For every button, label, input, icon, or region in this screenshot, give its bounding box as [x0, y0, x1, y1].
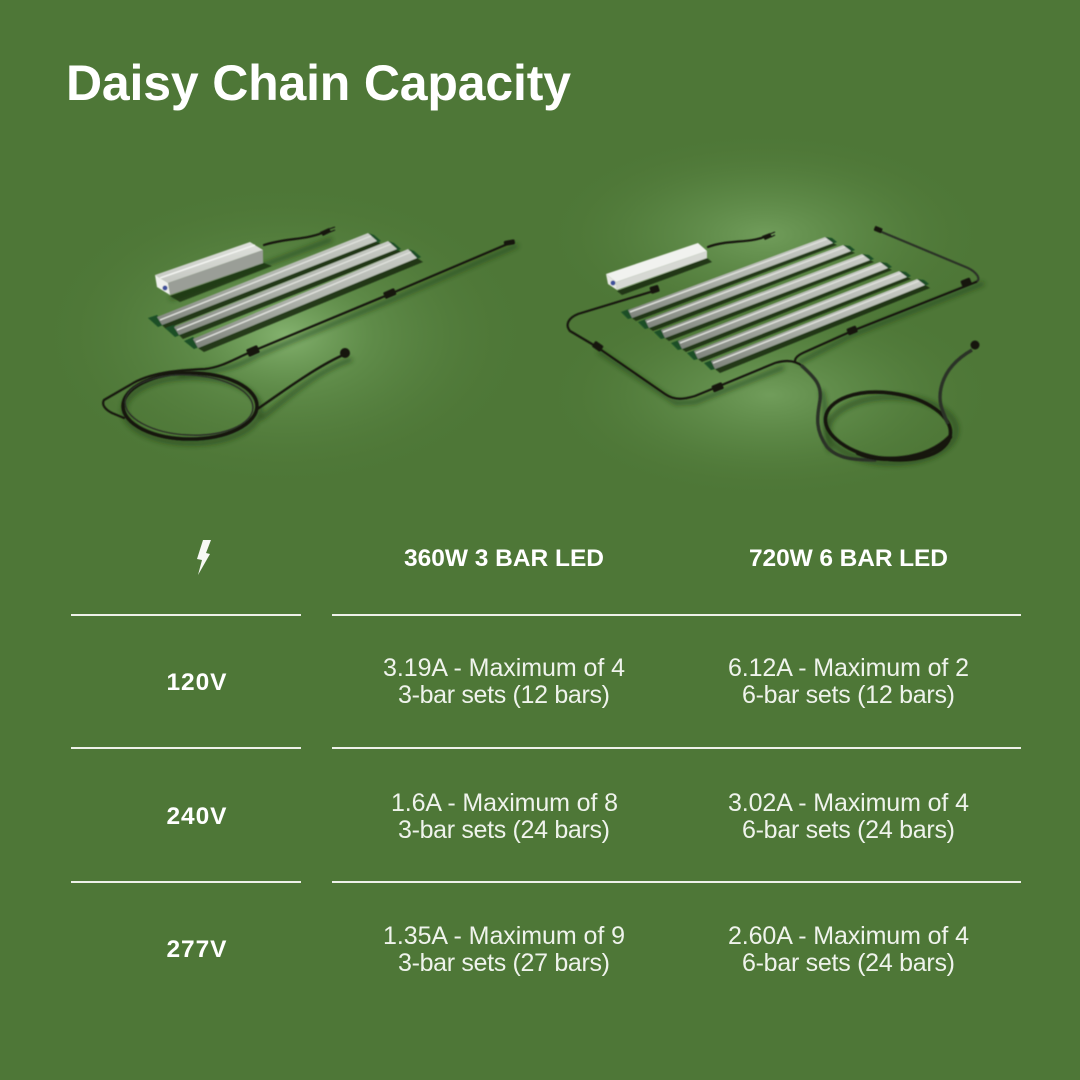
cell: 240V 360W: 3-bar sets (24 bars): [398, 816, 610, 844]
cell: 120V 360W: 3-bar sets (12 bars): [398, 681, 610, 709]
daisy chain cable right loop: [795, 226, 978, 361]
daisy chain cable left loop: [568, 285, 875, 460]
cell: 240V 360W: [391, 789, 618, 844]
LED bar 6: [704, 279, 929, 370]
LED bar 3: [654, 254, 874, 339]
title: Daisy Chain Capacity: [66, 55, 571, 111]
cell: 120V 720W: [728, 654, 969, 709]
cell: 120V 360W: 3.19A - Maximum of 4: [383, 654, 625, 682]
background glow: left product: [35, 180, 535, 490]
LED bar 3: [184, 249, 421, 349]
cell: 277V 720W: [728, 922, 969, 977]
background glow: right product bottom: [540, 290, 1000, 500]
cell: 277V 360W: 1.35A - Maximum of 9: [383, 922, 625, 950]
product image: 720W 6 bar kit: [568, 226, 982, 467]
cell: 277V 360W: 3-bar sets (27 bars): [398, 949, 610, 977]
table: [71, 540, 1021, 977]
cell: 240V 360W: 1.6A - Maximum of 8: [391, 789, 618, 817]
cell: 120V 720W: 6.12A - Maximum of 2: [728, 654, 969, 682]
cell: 240V 720W: 6-bar sets (24 bars): [742, 816, 955, 844]
cell: 277V 360W: [383, 922, 625, 977]
cable connectors: [246, 239, 515, 358]
LED bar 2: [165, 241, 401, 337]
driver power cord: [708, 232, 775, 247]
product image: 360W 3 bar kit: [103, 227, 516, 443]
column heading: 360W: 360W 3 BAR LED: [404, 545, 604, 572]
icon: lightning bolt: [197, 540, 211, 575]
bar shadows: [632, 243, 930, 373]
cell: 240V 720W: 3.02A - Maximum of 4: [728, 789, 969, 817]
row label: 120V: 120V: [166, 669, 227, 696]
cable coil and plug: [821, 340, 980, 467]
LED bar 1: [621, 237, 837, 319]
column heading: 720W: 720W 6 BAR LED: [749, 545, 948, 572]
cell: 277V 720W: 6-bar sets (24 bars): [742, 949, 955, 977]
bar shadows: [162, 241, 423, 352]
driver power cord: [264, 227, 335, 245]
cable connectors: [592, 285, 724, 393]
background glow: right product top: [540, 130, 990, 340]
LED bar 1: [148, 233, 381, 327]
LED bar 5: [687, 271, 911, 360]
LED driver box: [155, 242, 272, 302]
daisy chain cable with coil: [103, 239, 515, 439]
cable shadows: [600, 284, 982, 463]
cable shadows: [124, 240, 516, 443]
cell: 120V 720W: 6-bar sets (12 bars): [742, 681, 955, 709]
cell: 277V 720W: 2.60A - Maximum of 4: [728, 922, 969, 950]
LED bar 2: [638, 245, 855, 329]
row label: 240V: 240V: [166, 803, 227, 830]
row label: 277V: 277V: [166, 936, 227, 963]
cell: 120V 360W: [383, 654, 625, 709]
LED bar 4: [671, 262, 892, 350]
LED driver box: [606, 243, 712, 295]
cell: 240V 720W: [728, 789, 969, 844]
